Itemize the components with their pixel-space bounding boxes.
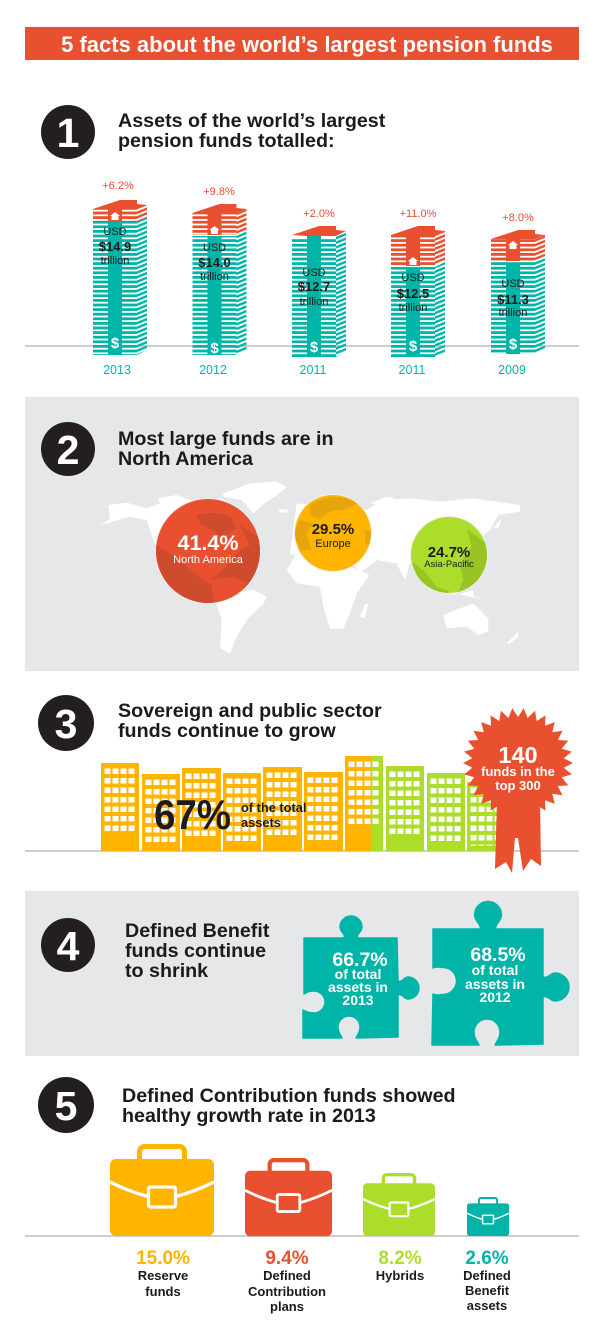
circle: Asia-Pacific bbox=[410, 516, 490, 597]
label: hybrids: 8.2% bbox=[378, 1248, 422, 1269]
heading 1: Assets of the world’s largest bbox=[118, 110, 385, 132]
stat: 67 percent: 67% bbox=[154, 791, 231, 838]
rosette badge bbox=[463, 708, 573, 873]
panel 1: total assets bbox=[25, 105, 579, 377]
label: defined benefit assets: 2.6% bbox=[465, 1248, 509, 1269]
number badge 4 bbox=[41, 918, 95, 972]
circle: Asia-Pacific: Asia-Pacific bbox=[424, 559, 474, 570]
stacked bar 2011: trillion bbox=[300, 296, 328, 308]
label: defined benefit assets: Defined bbox=[463, 1268, 511, 1283]
puzzle piece 2013: 66.7% bbox=[332, 949, 388, 971]
label: reserve funds: 15.0% bbox=[136, 1248, 190, 1269]
rosette badge: 140 bbox=[498, 742, 538, 768]
stacked bar 2013: 2013 bbox=[103, 363, 131, 377]
stacked bar 2013: +6.2% bbox=[102, 180, 134, 192]
puzzle piece 2013: 2013 bbox=[342, 992, 374, 1008]
stacked bar 2013 bbox=[93, 180, 147, 377]
stat: 67 percent bbox=[154, 791, 306, 838]
stacked bar 2009: 2009 bbox=[498, 363, 526, 377]
heading 4: funds continue bbox=[125, 940, 266, 962]
heading 2: North America bbox=[118, 448, 254, 470]
heading 5: healthy growth rate in 2013 bbox=[122, 1105, 376, 1127]
number badge 1 bbox=[41, 105, 95, 159]
stacked bar 2011: USD bbox=[302, 267, 326, 279]
title banner bbox=[25, 27, 579, 60]
panel 4: defined benefit bbox=[25, 891, 579, 1056]
heading 3: Sovereign and public sector bbox=[118, 700, 382, 722]
label: defined contribution plans: Defined bbox=[263, 1268, 311, 1283]
stacked bar 2011 bbox=[292, 208, 346, 377]
stat: 67 percent: of the total bbox=[241, 800, 306, 815]
circle: Asia-Pacific: 24.7% bbox=[428, 544, 470, 561]
circle: Europe bbox=[293, 494, 373, 572]
briefcase: defined contribution bbox=[245, 1160, 332, 1236]
label: defined benefit assets bbox=[463, 1248, 511, 1313]
puzzle piece 2012 bbox=[432, 902, 569, 1045]
stacked bar 2009 bbox=[491, 212, 545, 377]
stacked bar 2011: 2011 bbox=[300, 363, 326, 377]
panel 2: regions bbox=[25, 397, 579, 671]
puzzle piece 2013: assets in bbox=[328, 979, 388, 995]
puzzle piece 2013: of total bbox=[335, 966, 381, 982]
number badge 3: 3 bbox=[55, 701, 77, 747]
title banner: 5 facts about the world’s largest pension funds bbox=[61, 32, 553, 57]
label: hybrids: Hybrids bbox=[376, 1268, 424, 1283]
number badge 4: 4 bbox=[57, 923, 80, 969]
puzzle piece 2012: of total bbox=[472, 962, 518, 978]
briefcase: defined benefit bbox=[467, 1198, 509, 1236]
rosette badge: top 300 bbox=[495, 778, 541, 793]
circle: North America: North America bbox=[173, 554, 244, 566]
label: hybrids bbox=[376, 1248, 424, 1283]
stacked bar 2013: USD bbox=[103, 226, 127, 238]
stacked bar 2012: USD bbox=[203, 242, 226, 254]
stacked bar 2012: $14.0 bbox=[198, 255, 231, 270]
rosette badge: funds in the bbox=[481, 764, 555, 779]
stacked bar 2011 second: USD bbox=[401, 272, 425, 284]
heading 4: Defined Benefit bbox=[125, 920, 269, 942]
heading 1: pension funds totalled: bbox=[118, 130, 335, 152]
number badge 2 bbox=[41, 422, 95, 476]
stacked bar 2011 second: +11.0% bbox=[400, 208, 437, 220]
stacked bar 2013: trillion bbox=[101, 255, 129, 267]
puzzle piece 2012: 68.5% bbox=[470, 944, 526, 966]
number badge 3 bbox=[38, 695, 94, 751]
world map bbox=[99, 482, 520, 653]
number badge 2: 2 bbox=[57, 427, 79, 473]
label: defined contribution plans bbox=[248, 1248, 326, 1314]
stacked bar 2009: $ bbox=[509, 336, 518, 353]
panel 5: defined contribution bbox=[25, 1077, 579, 1314]
label: reserve funds: Reserve bbox=[138, 1268, 188, 1283]
stacked bar 2011 second: $12.5 bbox=[397, 286, 429, 301]
puzzle piece 2012: assets in bbox=[465, 976, 525, 992]
stacked bar 2012: 2012 bbox=[199, 363, 227, 377]
heading 4: to shrink bbox=[125, 960, 208, 982]
stacked bar 2012: trillion bbox=[200, 271, 229, 283]
stacked bar 2012: $ bbox=[210, 340, 219, 357]
stacked bar 2013: $14.9 bbox=[99, 239, 131, 254]
stacked bar 2011: $12.7 bbox=[298, 279, 330, 294]
briefcase: hybrids bbox=[363, 1175, 435, 1236]
stacked bar 2012 bbox=[192, 186, 246, 377]
stacked bar 2009: +8.0% bbox=[502, 212, 534, 224]
label: defined benefit assets: assets bbox=[467, 1298, 507, 1313]
stat: 67 percent: assets bbox=[241, 815, 281, 830]
label: defined contribution plans: 9.4% bbox=[265, 1248, 309, 1269]
puzzle piece 2013 bbox=[303, 916, 419, 1038]
stacked bar 2009: $11.3 bbox=[497, 292, 529, 307]
heading 2: Most large funds are in bbox=[118, 428, 334, 450]
stacked bar 2011 second: $ bbox=[409, 338, 418, 355]
panel 3: sovereign funds bbox=[25, 695, 579, 873]
puzzle piece 2012: 2012 bbox=[479, 989, 511, 1005]
stacked bar 2012: +9.8% bbox=[203, 186, 235, 198]
circle: Europe: Europe bbox=[315, 538, 351, 550]
stacked bar 2011 second: trillion bbox=[399, 302, 427, 314]
stacked bar 2011 second bbox=[391, 208, 445, 377]
number badge 1: 1 bbox=[57, 110, 79, 156]
stacked bar 2011: $ bbox=[310, 339, 319, 356]
buildings skyline bbox=[101, 756, 505, 851]
label: defined benefit assets: Benefit bbox=[465, 1283, 510, 1298]
stacked bar 2013: $ bbox=[111, 335, 120, 352]
label: defined contribution plans: plans bbox=[270, 1299, 304, 1314]
label: reserve funds: funds bbox=[145, 1284, 181, 1299]
circle: North America bbox=[153, 498, 265, 607]
number badge 5 bbox=[38, 1077, 94, 1133]
briefcase: reserve funds bbox=[110, 1146, 214, 1236]
stacked bar 2009: USD bbox=[501, 278, 525, 290]
stacked bar 2009: trillion bbox=[499, 307, 527, 319]
label: reserve funds bbox=[136, 1248, 190, 1299]
label: defined contribution plans: Contribution bbox=[248, 1284, 326, 1299]
number badge 5: 5 bbox=[55, 1083, 77, 1129]
heading 5: Defined Contribution funds showed bbox=[122, 1085, 456, 1107]
circle: Europe: 29.5% bbox=[312, 521, 354, 538]
circle: North America: 41.4% bbox=[178, 531, 238, 555]
stacked bar 2011 second: 2011 bbox=[399, 363, 425, 377]
stacked bar 2011: +2.0% bbox=[303, 208, 335, 220]
heading 3: funds continue to grow bbox=[118, 720, 336, 742]
